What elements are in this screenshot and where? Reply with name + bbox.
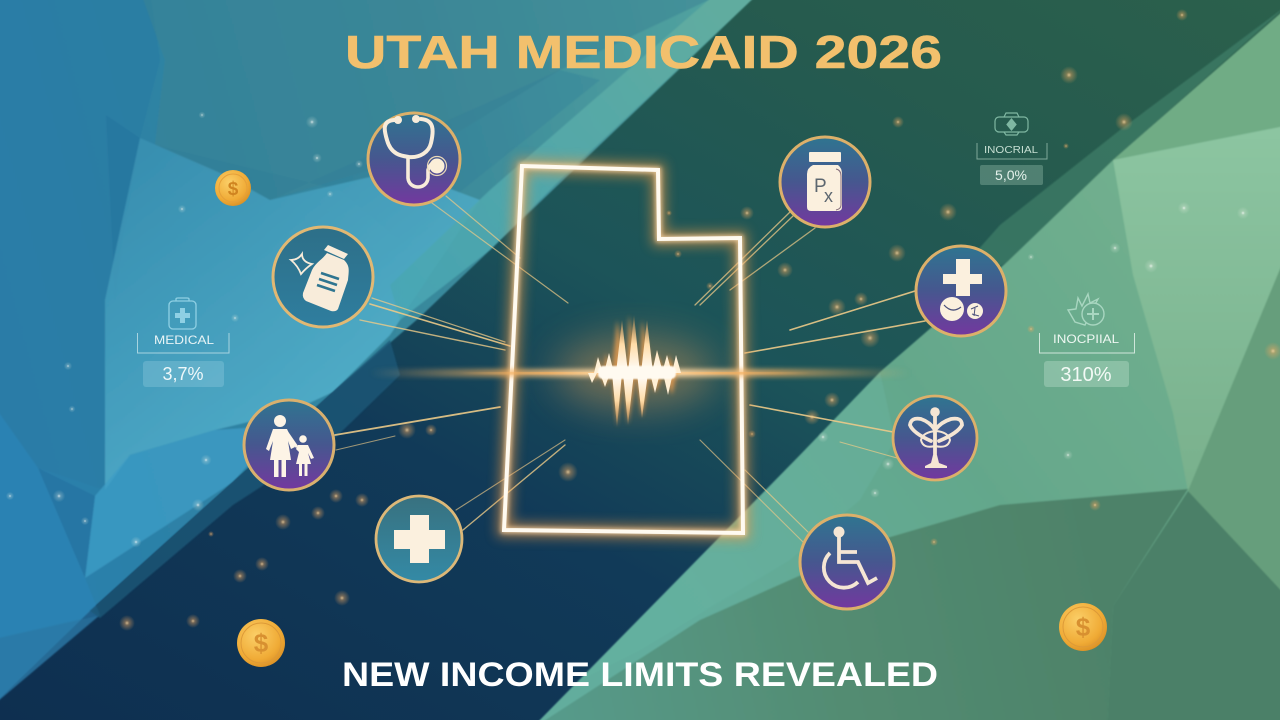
icon: leaf and plus: [1068, 294, 1104, 325]
stat: medical: 3,7%: [162, 364, 204, 384]
connector lines: [335, 196, 925, 542]
pulse waveform: [370, 315, 910, 427]
icon: cross: [376, 496, 462, 582]
stat: medical: MEDICAL: [154, 333, 214, 347]
background: green polygon panel: [530, 3, 1280, 720]
stat: right: INOCPIIAL: [1053, 332, 1119, 346]
coin: upper left: $: [228, 179, 239, 200]
icon: Rx bottle: [780, 137, 870, 227]
icon: Rx bottle: P: [814, 176, 827, 197]
background: blue polygon panel: [0, 0, 762, 708]
title: UTAH MEDICAID 2026: [345, 26, 942, 78]
icon: badge: [995, 113, 1028, 135]
coin: upper left: [215, 170, 251, 206]
subtitle: NEW INCOME LIMITS REVEALED: [342, 656, 938, 694]
background: mid-blue band along dark edge: [90, 340, 400, 618]
icon: wheelchair: [800, 515, 894, 609]
coin: lower left: [237, 619, 285, 667]
icon: parent and child: [244, 400, 334, 490]
icon: medical kit: [169, 298, 196, 329]
coin: lower left: $: [254, 628, 269, 658]
stat: right: [1040, 294, 1134, 387]
Utah state outline: [504, 166, 743, 533]
icon: Rx bottle: x: [824, 186, 833, 206]
icon: cross and pills: [916, 246, 1006, 336]
stat: medical: [138, 298, 229, 387]
coin: lower right: $: [1076, 612, 1091, 642]
icon: caduceus: [893, 396, 977, 480]
stat: top right: [977, 113, 1047, 185]
stat: top right: 5,0%: [995, 167, 1027, 183]
icon: stethoscope: [368, 113, 460, 205]
icon: medicine bottle with sparkle: [273, 227, 373, 327]
coin: lower right: [1059, 603, 1107, 651]
stat: right: 310%: [1060, 364, 1112, 386]
stat: top right: INOCRIAL: [984, 145, 1038, 156]
